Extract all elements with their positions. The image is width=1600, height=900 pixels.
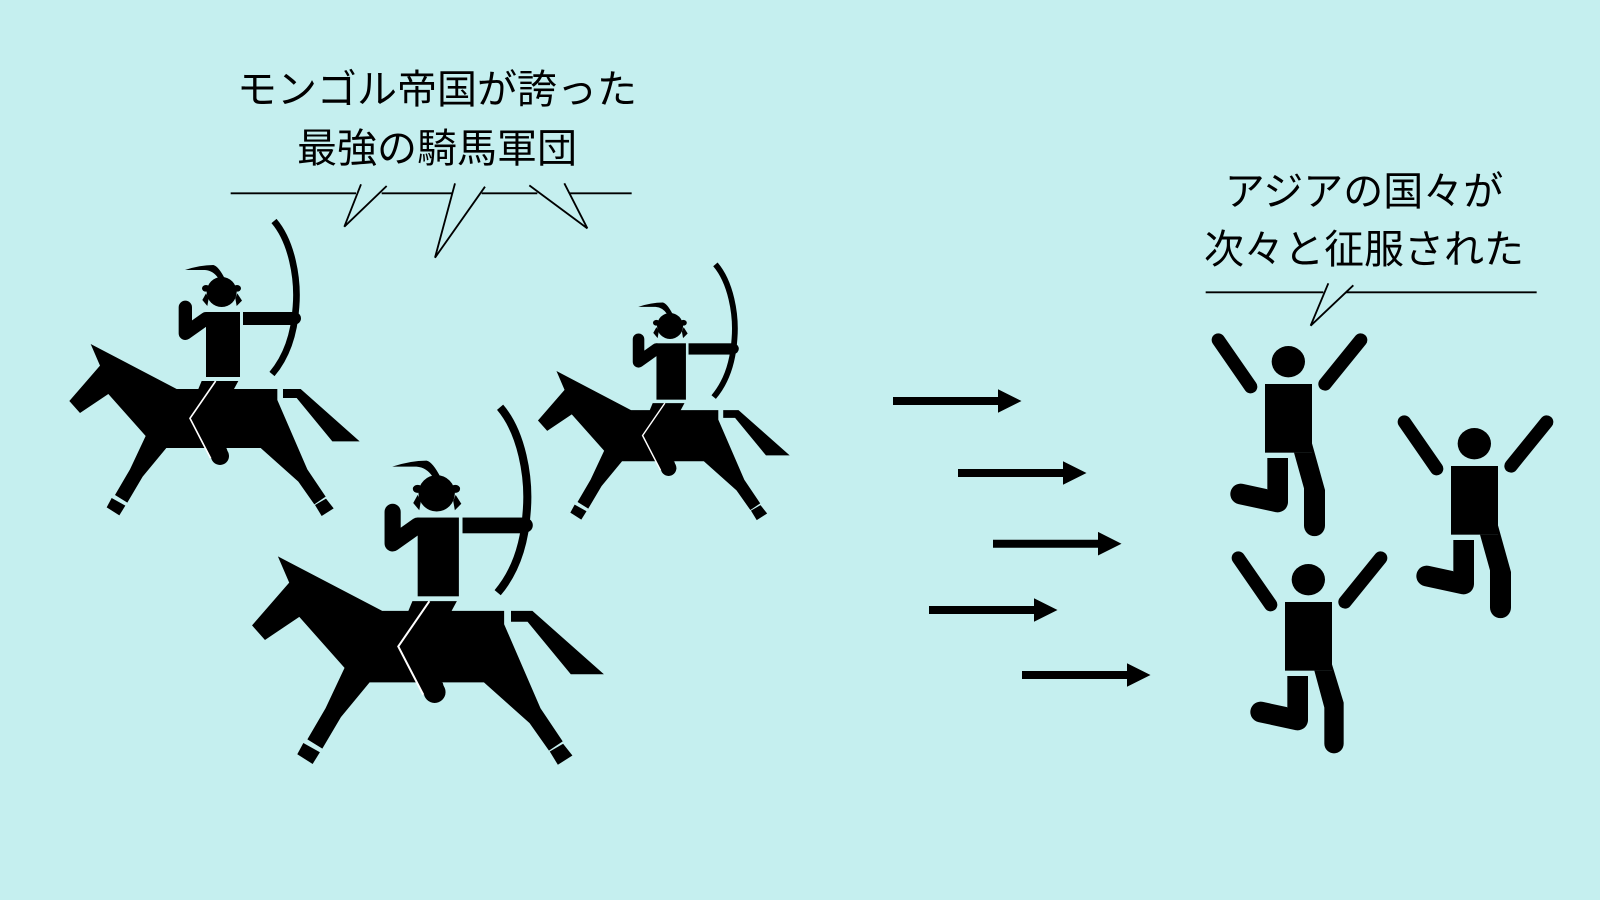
icon: mounted archer front [252,407,604,765]
arrows: attack direction [893,389,1150,687]
heading: Mongol cavalry: 最強の騎馬軍団 [297,127,577,171]
heading: Mongol cavalry: モンゴル帝国が誇った [237,68,637,112]
heading: Asian nations: アジアの国々が [1225,170,1503,214]
speech line: nations [1206,283,1537,326]
speech line: cavalry [231,183,632,258]
icon: person arms raised, right [1404,422,1547,618]
icon: mounted archer upper right [538,264,790,520]
icon: person arms raised, top [1218,340,1361,536]
icon: mounted archer upper left [69,221,360,516]
icon: person arms raised, bottom [1238,558,1381,753]
heading: Asian nations: 次々と征服された [1204,228,1524,272]
heading: Mongol cavalry [237,68,637,171]
heading: Asian nations [1204,170,1524,272]
